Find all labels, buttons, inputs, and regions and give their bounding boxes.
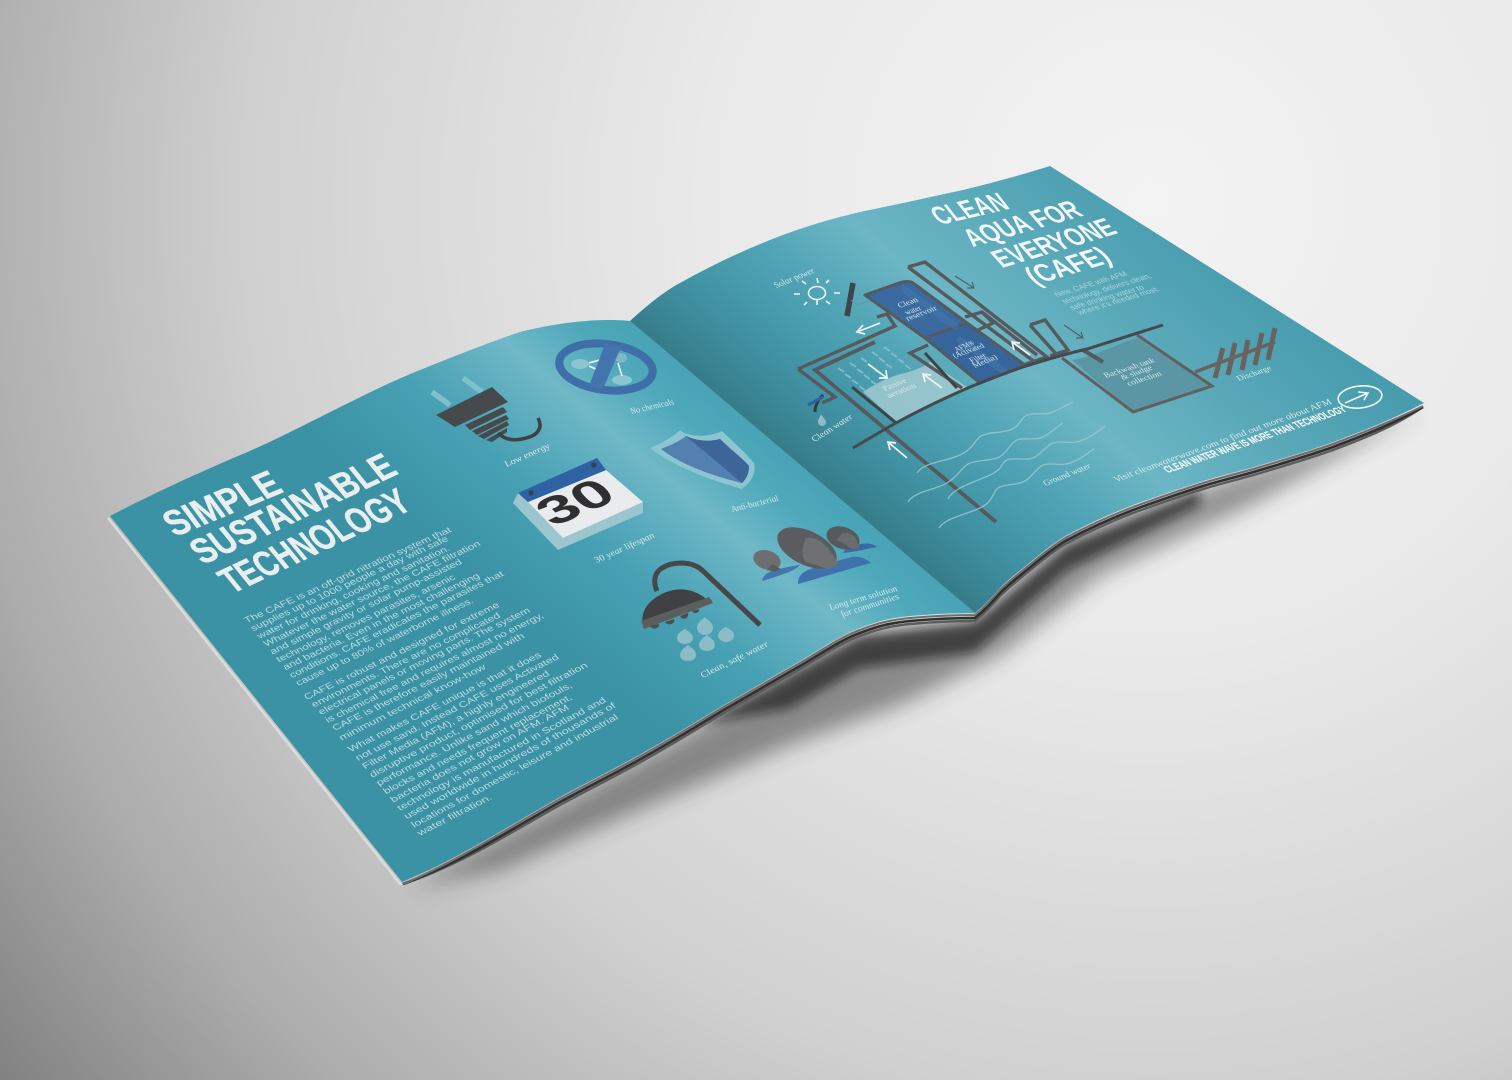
diagram: water treatment system xyxy=(772,262,1275,528)
intro text: where it's needed most. xyxy=(1074,285,1162,317)
diagram labels: Discharge xyxy=(1234,364,1274,383)
backwash tank xyxy=(1062,335,1212,412)
label: low energy: Low energy xyxy=(500,441,553,469)
heading: simple sustainable technology: TECHNOLOGY xyxy=(210,482,420,601)
icon: sun xyxy=(794,278,840,305)
intro text xyxy=(1052,270,1162,317)
body copy: locations for domestic, leisure and industrial xyxy=(409,712,620,829)
footer tagline: CLEAN WATER WAVE IS MORE THAN TECHNOLOGY xyxy=(1161,405,1350,475)
pipework xyxy=(798,262,1103,522)
body copy: used worldwide in hundreds of thousands of xyxy=(401,700,618,821)
diagram labels: AFM® xyxy=(952,339,977,354)
body copy: conditions. CAFE eradicates the parasites that xyxy=(287,569,506,680)
body copy: electrical panels or moving parts. The system xyxy=(316,605,532,717)
diagram labels: Backwash tank xyxy=(1102,356,1158,380)
body copy: supplies up to 1000 people a day with safe xyxy=(248,534,450,633)
flow arrows: dark xyxy=(955,276,1083,338)
brochure shadow xyxy=(410,410,1423,888)
diagram labels: reservoir xyxy=(903,304,939,323)
icon: tap xyxy=(808,395,826,426)
body copy: water filtration. xyxy=(414,792,494,838)
tank highlights xyxy=(905,290,1005,372)
icon: calendar 30: 30 xyxy=(524,470,627,534)
label: anti-bacterial: Anti-bacterial xyxy=(728,493,781,514)
body copy: technology is manufactured in Scotland and xyxy=(395,695,608,813)
body copy: water for drinking, cooking and sanitation. xyxy=(253,543,452,641)
icon: shower xyxy=(641,563,760,661)
heading: clean aqua for everyone: AQUA FOR xyxy=(956,196,1089,253)
discharge pipe xyxy=(1195,328,1275,378)
icon: solar panel xyxy=(847,283,868,316)
diagram labels: Media) xyxy=(970,353,1000,370)
waves: ground water xyxy=(908,402,1105,528)
diagram labels: collection xyxy=(1125,369,1164,388)
diagram labels: (Activated xyxy=(950,341,987,360)
diagram labels: & sludge xyxy=(1118,363,1155,382)
ground line xyxy=(853,325,1163,448)
diagram labels: Filter xyxy=(967,352,988,365)
page stack edges xyxy=(108,406,1423,885)
icon: no chemicals xyxy=(557,338,655,396)
footer link text: Visit cleanwaterwave.com to find out more about AFM xyxy=(1111,397,1337,484)
icon: shield, anti-bacterial xyxy=(650,430,755,489)
panel: left page xyxy=(110,320,975,882)
body copy: What makes CAFE unique is that it does xyxy=(346,650,544,754)
intro text: safe drinking water to xyxy=(1067,283,1147,312)
diagram labels: Clean water xyxy=(809,413,857,444)
label: 30 year lifespan: 30 year lifespan xyxy=(591,531,657,565)
heading: simple sustainable technology xyxy=(154,446,420,601)
body copy: performance. Unlike sand which biofouls, xyxy=(374,680,574,788)
body copy: minimum technical know-how xyxy=(337,662,489,742)
icon: calendar 30 xyxy=(513,458,643,550)
body copy: disruptive product, optimised for best filtration xyxy=(367,660,590,779)
diagram labels: Solar power xyxy=(772,267,819,290)
heading: clean aqua for everyone: (CAFE) xyxy=(1018,242,1118,290)
body copy: is chemical free and requires almost no energy, xyxy=(323,611,546,725)
body copy: blocks and needs frequent replacement, xyxy=(381,692,574,796)
icon: people, communities xyxy=(751,519,877,584)
intro text: New, CAFE with AFM xyxy=(1052,270,1129,299)
body copy xyxy=(242,525,620,838)
label: no chemicals: No chemicals xyxy=(627,397,676,416)
body copy: The CAFE is an off-grid nitration system that xyxy=(242,525,454,625)
body copy: Whatever the water source, the CAFE filtration xyxy=(261,539,483,648)
intro text: technology, delivers clean, xyxy=(1060,272,1153,306)
diagram labels: Ground water xyxy=(1041,462,1095,488)
panel: right page xyxy=(630,166,1424,613)
body copy: CAFE is robust and designed for extreme xyxy=(302,600,502,702)
reservoir tank xyxy=(865,282,967,338)
body copy: Filter Media (AFM), a highly engineered xyxy=(360,669,552,771)
body copy: cause up to 80% of waterborne illness. xyxy=(293,596,476,688)
body copy: technology, removes parasites, arsenic xyxy=(274,572,458,664)
rain dashes xyxy=(838,347,911,390)
aeration tank water xyxy=(863,362,967,422)
inner walls xyxy=(852,353,957,422)
heading: clean aqua for everyone xyxy=(924,188,1124,290)
flow arrows: white xyxy=(857,323,1030,458)
body copy: and bacteria. Even in the most challenging xyxy=(280,571,482,672)
body copy: bacteria does not grow on AFM. AFM xyxy=(388,703,571,804)
heading: simple sustainable technology: SUSTAINABLE xyxy=(181,446,405,572)
heading: clean aqua for everyone: CLEAN xyxy=(924,188,1016,231)
body copy: and simple gravity or solar pump-assisted xyxy=(267,557,464,656)
body copy: CAFE is therefore easily maintained with xyxy=(330,631,527,733)
diagram labels: Clean xyxy=(895,296,920,310)
icon: plug, low energy xyxy=(432,378,540,442)
diagram labels: Passive xyxy=(880,377,909,393)
icon: arrow in circle xyxy=(1337,384,1383,410)
heading: clean aqua for everyone: EVERYONE xyxy=(985,213,1124,273)
heading: simple sustainable technology: SIMPLE xyxy=(154,464,290,544)
label: long term solution for communities: Long term solution xyxy=(825,584,900,612)
diagram labels: aeration xyxy=(884,382,918,400)
body copy: environments. There are no complicated xyxy=(309,611,503,709)
AFM tank xyxy=(925,323,1025,383)
label: long term solution for communities: for communities xyxy=(838,592,902,619)
label: clean, safe water: Clean, safe water xyxy=(697,639,771,679)
diagram labels: water xyxy=(902,304,924,317)
diagram labels xyxy=(772,267,1274,488)
body copy: not use sand. Instead CAFE uses Activated xyxy=(353,652,561,763)
